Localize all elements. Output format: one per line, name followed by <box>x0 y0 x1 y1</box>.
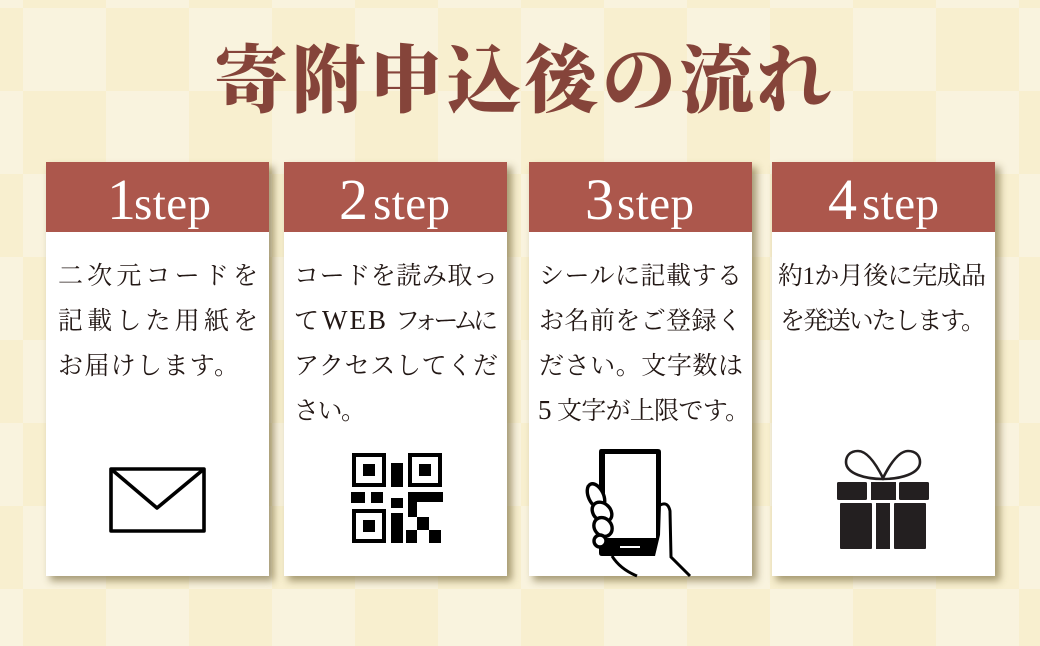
step 4 header: 4 <box>828 167 857 232</box>
icon: hand holding phone <box>584 449 690 576</box>
icon: QR code <box>351 453 443 543</box>
step 3 text: お名前をご登録く <box>539 307 742 335</box>
step 3 header: 3 <box>585 167 614 232</box>
panel: step 2 <box>284 162 512 581</box>
step 3 text: 5 <box>538 395 552 425</box>
step 2 text: フォームに <box>395 308 498 335</box>
step 1 header <box>46 162 269 232</box>
icon: envelope <box>111 469 204 531</box>
icon: gift box <box>837 451 929 549</box>
step 1 text <box>58 262 258 380</box>
step 2 text: さい。 <box>294 398 366 425</box>
step 1 text: 記載した用紙を <box>58 307 258 335</box>
step 2 header: step <box>373 178 450 230</box>
step 1 header: step <box>134 178 211 230</box>
step 3 header <box>529 162 752 232</box>
step 4 text: 約1か月後に完成品 <box>778 262 986 290</box>
step 2 text: アクセスしてくだ <box>294 353 498 380</box>
step 4 header: step <box>862 178 939 230</box>
step 1 header: 1 <box>107 167 136 232</box>
panel: step 4 <box>772 162 1000 581</box>
title: 寄附申込後の流れ <box>214 41 831 123</box>
step 3 header: step <box>617 178 694 230</box>
step 3 text <box>538 262 750 425</box>
panel: step 1 <box>46 162 274 581</box>
panel: step 3 <box>529 162 757 581</box>
step 1 text: お届けします。 <box>58 353 239 380</box>
step 2 text: て <box>294 308 319 335</box>
step 2 text: コードを読み取っ <box>294 262 498 290</box>
step 2 text: WEB <box>322 305 386 335</box>
step 4 text: を発送いたします。 <box>780 307 986 335</box>
step 3 text: ださい。文字数は <box>539 352 743 380</box>
step 2 text <box>294 262 498 425</box>
step 3 text: 文字が上限です。 <box>557 397 750 425</box>
step 1 text: 二次元コードを <box>58 262 258 290</box>
step 2 header <box>284 162 507 232</box>
step 4 header <box>772 162 995 232</box>
step 3 text: シールに記載する <box>539 262 742 290</box>
step 4 text <box>778 262 986 335</box>
step 2 header: 2 <box>339 167 368 232</box>
